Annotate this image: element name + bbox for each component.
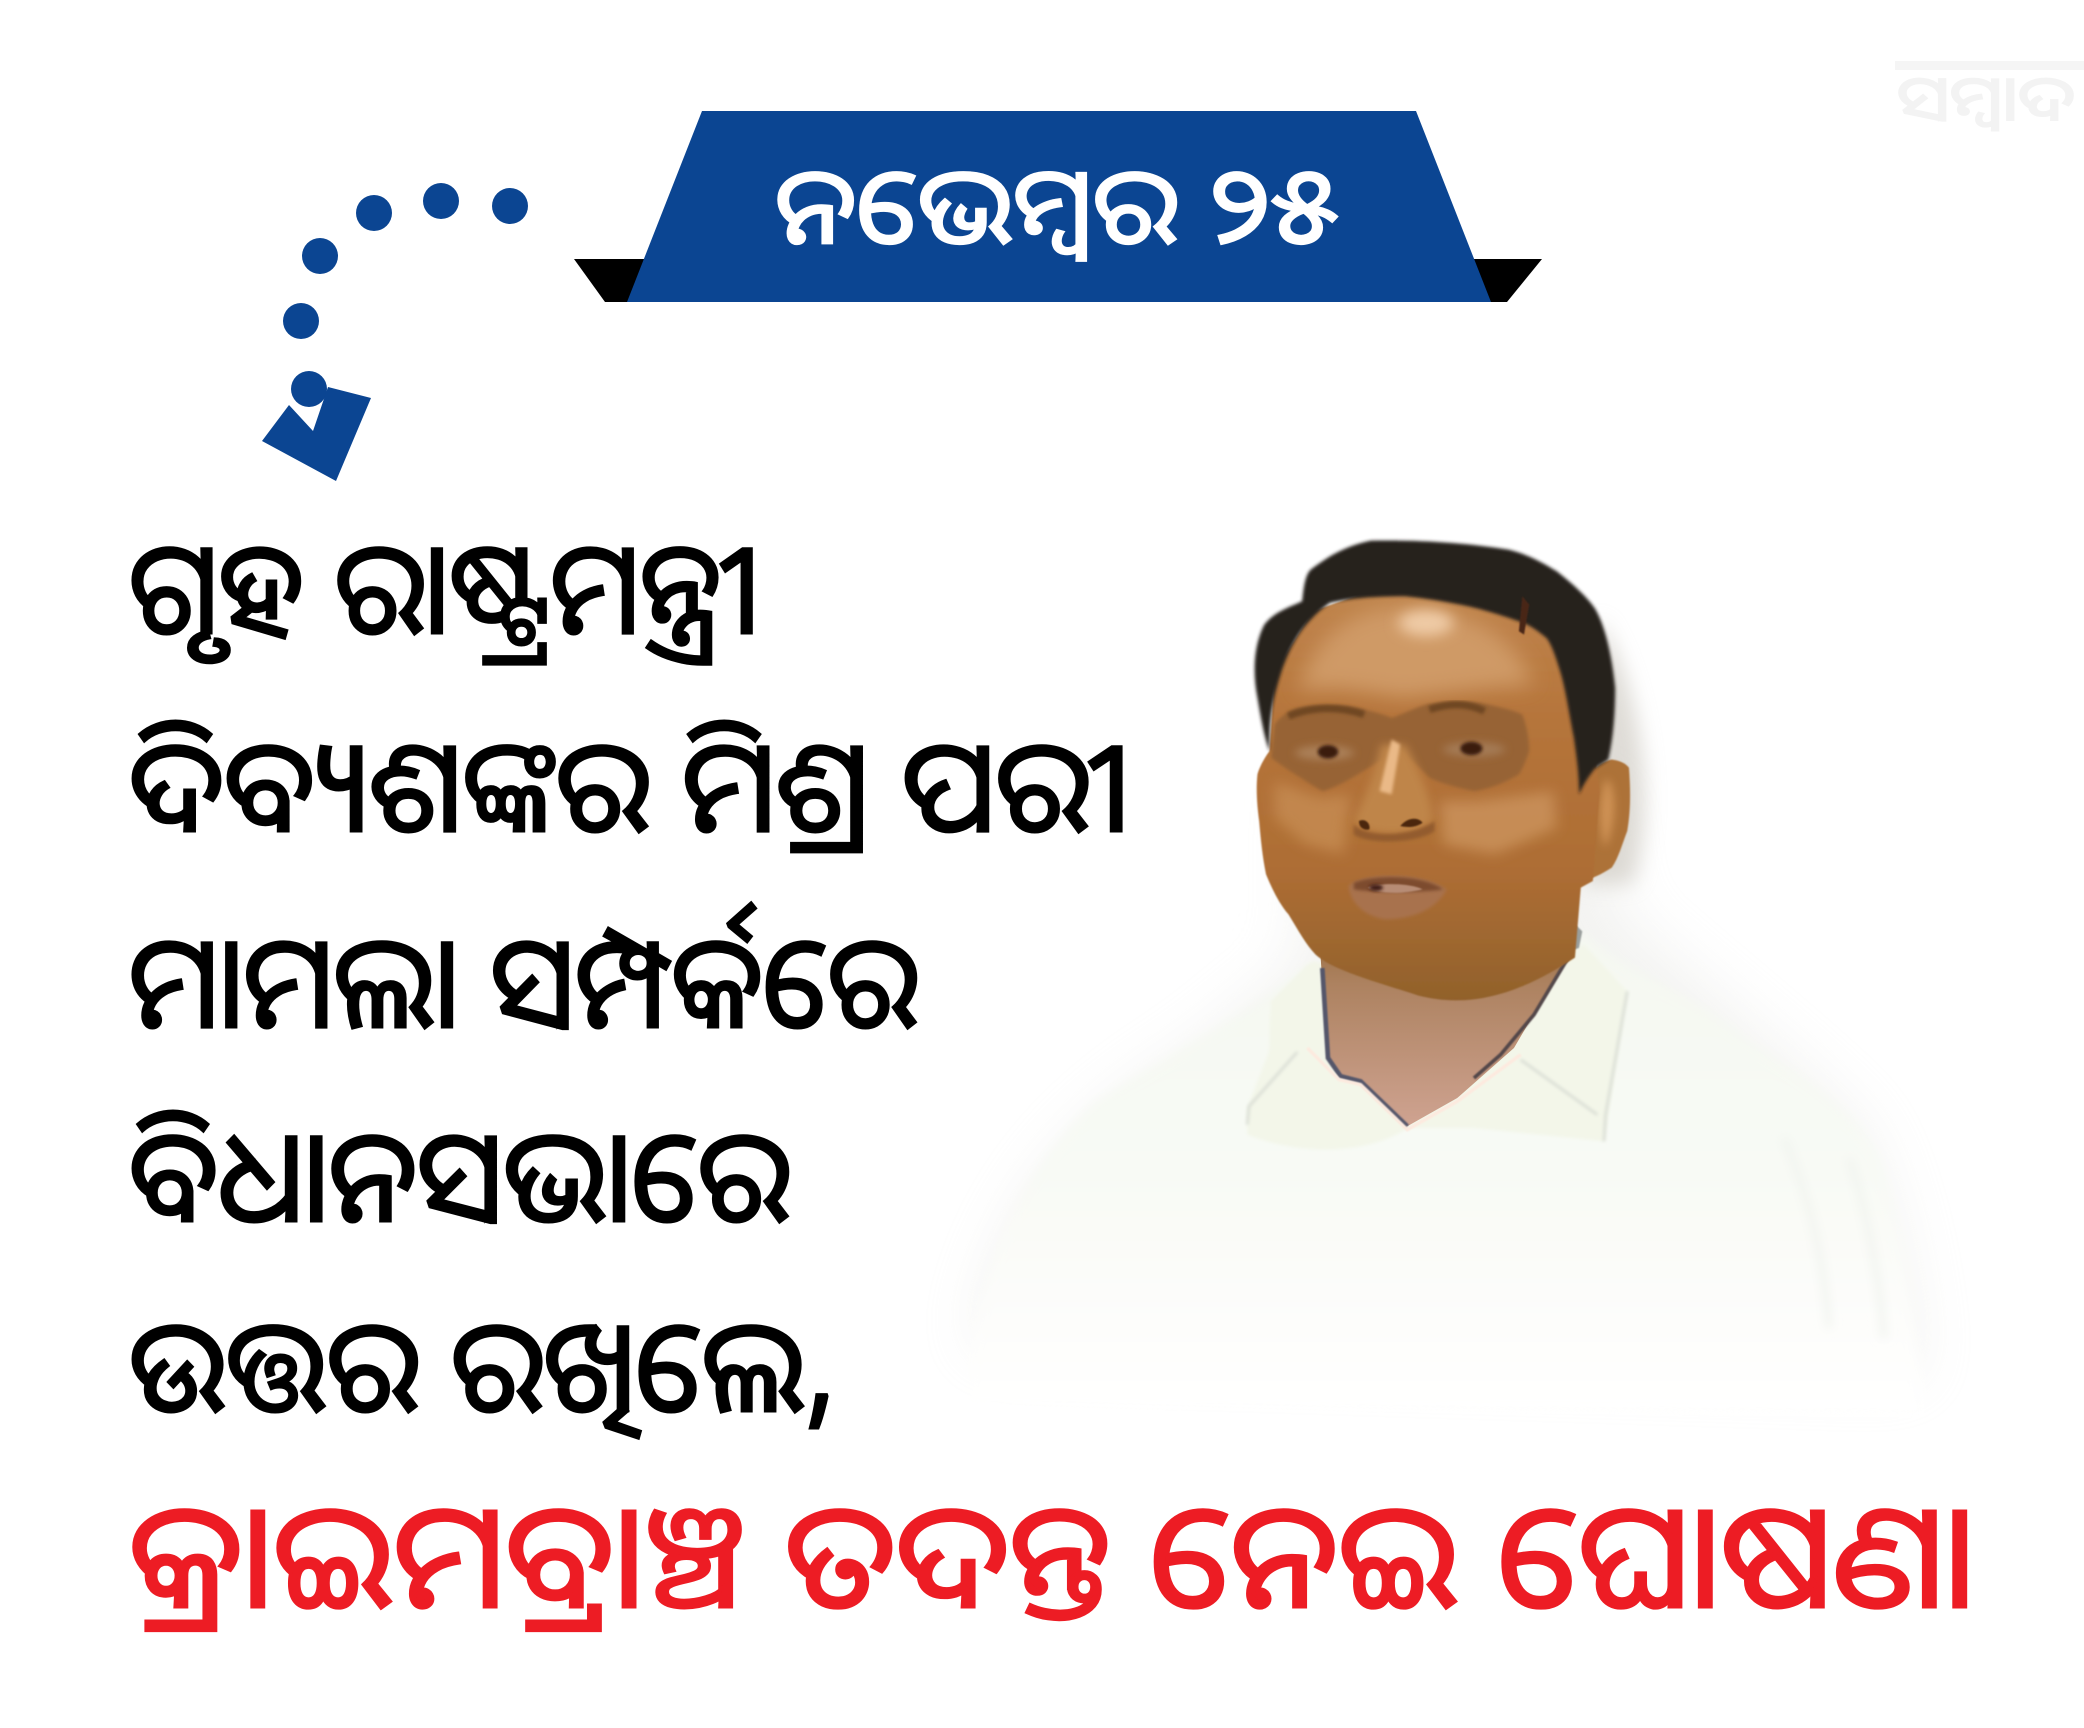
shirt folds [1784, 1138, 1884, 1338]
ear right [1583, 759, 1630, 881]
highlighted red headline: କ୍ରାଇମବ୍ରାଞ୍ଚ ତଦନ୍ତ ନେଇ ଘୋଷଣା [129, 1451, 1975, 1650]
nose [1354, 744, 1433, 834]
head shadow [1584, 618, 1645, 884]
nostrils [1359, 819, 1423, 830]
eye left [1318, 745, 1338, 758]
portrait photo of minister [964, 540, 1926, 1418]
date banner [574, 111, 1542, 302]
collar edges [1247, 991, 1627, 1141]
headline text in black [129, 496, 1129, 1449]
banner date text: ନଭେମ୍ବର ୨୫ [775, 131, 1337, 275]
banner blue trapezoid [627, 111, 1491, 302]
hair [1255, 540, 1615, 794]
line 5: ଉତ୍ତର ରଖିଲେ, [129, 1274, 835, 1449]
eye zone [1271, 702, 1529, 791]
inner collar dark edge right [1474, 956, 1569, 1078]
head [1255, 540, 1645, 1000]
neck and collar [1247, 908, 1627, 1150]
eye whites [1295, 745, 1354, 760]
collar band top right [1569, 921, 1582, 951]
shirt body [964, 933, 1926, 1418]
mouth [1349, 876, 1447, 919]
collar panel [1247, 945, 1627, 1150]
eye right [1460, 742, 1482, 755]
banner black fold left [574, 259, 690, 302]
face shape [1257, 571, 1600, 1000]
soft halo around figure [974, 788, 1919, 1378]
collar rim highlights [1307, 1048, 1521, 1130]
nose bridge highlight [1380, 739, 1400, 794]
line 1: ଗୃହ ରାଷ୍ଟ୍ରମନ୍ତ୍ରୀ [129, 496, 759, 671]
watermark: Sambad logo: ସମ୍ବାଦ [1897, 55, 2075, 139]
neck [1314, 908, 1571, 1126]
dotted arrow icon [262, 183, 528, 481]
eyebrows [1288, 705, 1484, 716]
inner collar dark edge left [1322, 968, 1407, 1126]
forehead highlight [1398, 610, 1454, 636]
cheek right [1440, 791, 1557, 854]
cheek left [1275, 781, 1350, 854]
line 4: ବିଧାନସଭାରେ [129, 1084, 790, 1259]
forehead glow [1299, 606, 1533, 698]
line 2: ଦିବ୍ୟଶଙ୍କର ମିଶ୍ର ପରୀ [129, 694, 1129, 869]
banner black fold right [1440, 259, 1542, 302]
collar band stripes left [1306, 975, 1316, 1025]
line 3: ମାମଲା ସମ୍ପର୍କରେ [129, 890, 918, 1065]
